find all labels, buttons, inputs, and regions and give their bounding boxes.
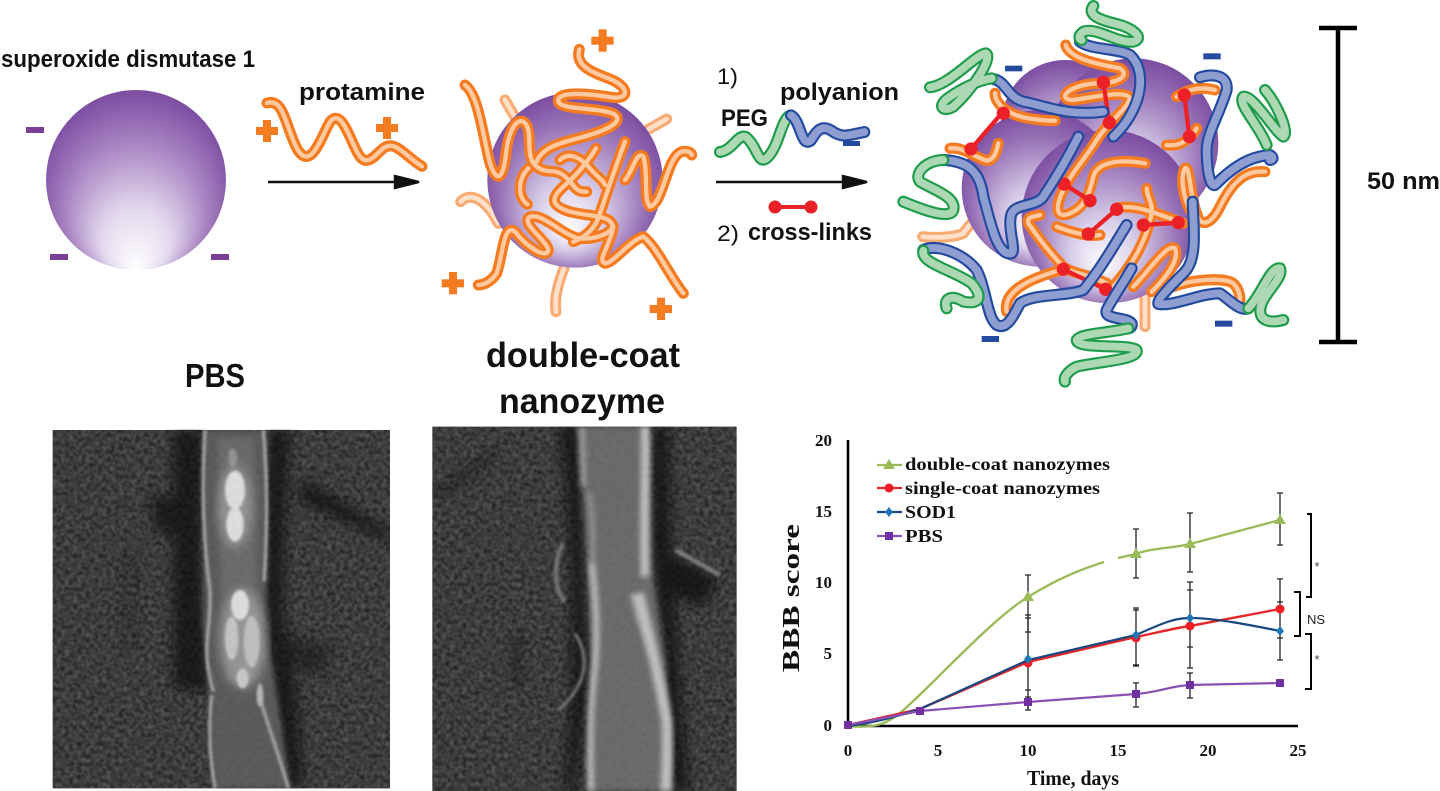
heading: double-coat nanozyme: nanozyme [499,382,665,421]
legend: SOD1 [905,502,956,522]
x axis labels: 10 [1020,741,1036,760]
scale bar: 50 nm: 50 nm [1367,168,1440,195]
label: step 1: 1) [717,64,738,89]
error bars [1025,493,1283,710]
x axis labels [844,741,1306,760]
legend: single-coat nanozymes [905,478,1100,498]
chains: protamine layer [950,45,1265,312]
chains: polyanion blue blocks [923,42,1273,328]
series: double-coat nanozymes [848,514,1286,727]
positive charges [442,29,672,320]
chain: PEG segment [720,115,791,160]
label: PEG: PEG [721,105,768,132]
x axis labels: 20 [1200,741,1216,760]
label: cross-links: cross-links [748,219,872,246]
significance brackets: * [1314,559,1320,574]
spheres: SOD1 cluster [962,58,1218,303]
axes [848,440,1298,726]
sphere: coated SOD1 [487,92,663,268]
legend [877,454,1110,546]
series: SOD1 [848,613,1284,726]
negative charges [26,127,229,260]
positive charges [256,117,398,142]
significance brackets: * [1314,652,1320,667]
panel: second coat step [716,64,899,246]
label: polyanion: polyanion [780,79,899,106]
arrow: to double coat [716,176,867,188]
image: MRI of nanozyme-treated spinal cord [432,427,737,791]
label: step 2: 2) [717,221,739,246]
legend: PBS [905,526,943,546]
x axis labels: 15 [1110,741,1126,760]
sphere: SOD1 [46,90,226,270]
label: protamine: protamine [299,79,425,106]
significance brackets [1294,514,1325,689]
x axis labels: 0 [844,741,852,760]
x axis labels: 5 [934,741,942,760]
series: PBS [844,679,1284,729]
panel: single-coat nanozyme [442,29,692,320]
negative charges [982,53,1232,342]
heading: PBS: PBS [185,357,245,394]
chains: PEG green corona [903,6,1285,382]
x axis title: Time, days [1027,766,1119,790]
scale bar: 50 nm [1319,28,1440,342]
faded background chains [461,100,667,312]
label: superoxide dismutase 1: superoxide dismutase 1 [1,46,255,73]
y axis labels: 0 [824,716,832,735]
chains: protamine coat [465,49,692,293]
y axis labels [815,431,832,735]
chain: polyanion segment [791,115,864,142]
y axis title: BBB score [779,524,805,672]
y axis labels: 20 [815,431,832,450]
heading: double-coat nanozyme [486,336,680,421]
image: MRI of PBS spinal cord [53,430,390,788]
y axis labels: 5 [824,644,832,663]
arrow: to single coat [268,176,419,188]
y axis labels: 15 [815,502,832,521]
faded chains [923,218,1145,327]
x axis labels: 25 [1290,741,1306,760]
negative charge [843,141,860,146]
panel: protamine step [256,79,425,188]
icon: cross-link [768,200,818,214]
significance brackets: NS [1307,612,1325,627]
chain: protamine [267,102,422,166]
legend: double-coat nanozymes [905,454,1110,474]
chart: BBB score over time [779,431,1325,790]
panel: double-coat nanozyme [903,6,1285,382]
panel: superoxide dismutase sphere [1,46,255,270]
y axis labels: 10 [815,573,832,592]
heading: double-coat nanozyme: double-coat [486,336,680,375]
red cross-links [964,76,1196,296]
series: single-coat nanozymes [848,604,1284,725]
